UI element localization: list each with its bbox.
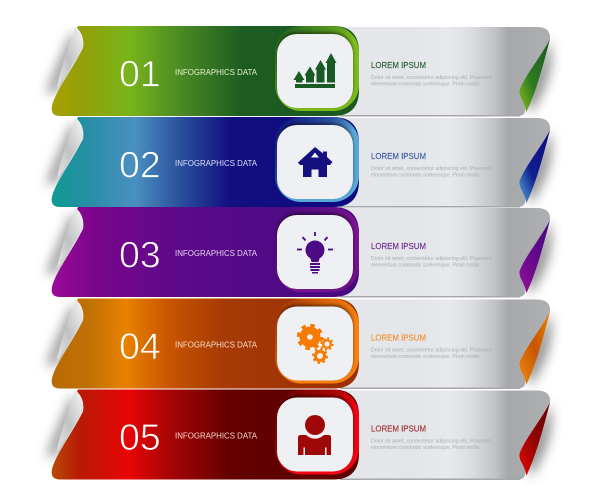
right curl — [519, 130, 550, 203]
right curl shadow — [524, 404, 552, 478]
left curl shadow — [46, 394, 80, 458]
body text — [371, 438, 491, 451]
left silver curl — [57, 300, 83, 360]
right curl — [519, 402, 550, 476]
right white panel — [340, 118, 550, 207]
body text: elementum commodo scelerisque. Proin mollis. — [371, 354, 481, 360]
body text: Dolor sit amet, consectetur adipiscing elit. Praesent — [371, 75, 491, 81]
coloured ribbon — [52, 390, 359, 480]
body text: Dolor sit amet, consectetur adipiscing elit. Praesent — [371, 256, 491, 262]
left curl shadow — [46, 211, 80, 275]
coloured ribbon — [52, 26, 359, 116]
right curl shadow — [524, 40, 552, 114]
icon: rising arrows chart — [294, 53, 336, 88]
right curl shadow — [524, 131, 552, 205]
icon frame ring — [275, 390, 359, 474]
body text: Dolor sit amet, consectetur adipiscing elit. Praesent — [371, 438, 491, 444]
ribbon label: INFOGRAPHICS DATA — [175, 248, 257, 258]
heading: LOREM IPSUM — [371, 332, 426, 342]
body text — [371, 75, 491, 88]
left silver curl — [57, 118, 83, 179]
body text: elementum commodo scelerisque. Proin mollis. — [371, 262, 481, 268]
right white panel — [340, 208, 550, 297]
heading: LOREM IPSUM — [371, 60, 426, 70]
right white panel — [340, 27, 550, 116]
left curl shadow — [46, 302, 80, 366]
body text: Dolor sit amet, consectetur adipiscing elit. Praesent — [371, 348, 491, 354]
ribbon label: INFOGRAPHICS DATA — [175, 340, 257, 350]
icon box shadow — [277, 213, 353, 287]
row 2: home — [46, 117, 552, 208]
body text: elementum commodo scelerisque. Proin mollis. — [371, 172, 481, 178]
heading: LOREM IPSUM — [371, 241, 426, 251]
panel bottom edge — [340, 388, 520, 389]
left silver curl — [57, 27, 83, 88]
icon frame ring — [275, 26, 359, 111]
row 3: idea — [46, 207, 552, 298]
row 4: settings — [46, 298, 552, 389]
number: 04 — [119, 325, 161, 367]
icon box — [277, 215, 353, 289]
icon box shadow — [277, 396, 353, 470]
right curl shadow — [524, 221, 552, 295]
right white panel — [340, 390, 550, 480]
icon: person — [298, 415, 331, 455]
ribbon label: INFOGRAPHICS DATA — [175, 158, 257, 168]
panel bottom edge — [340, 478, 520, 480]
row 1: growth — [46, 26, 552, 116]
icon box shadow — [277, 32, 353, 106]
icon: house — [298, 147, 332, 177]
heading: LOREM IPSUM — [371, 424, 426, 434]
coloured ribbon — [52, 117, 359, 207]
icon frame ring — [275, 298, 359, 384]
icon box — [277, 306, 353, 380]
icon: light bulb — [297, 232, 333, 274]
body text: elementum commodo scelerisque. Proin mollis. — [371, 445, 481, 451]
icon box — [277, 398, 353, 472]
icon box — [277, 125, 353, 199]
right white panel — [340, 300, 550, 388]
body text: Dolor sit amet, consectetur adipiscing elit. Praesent — [371, 166, 491, 172]
panel bottom edge — [340, 296, 520, 298]
left silver curl — [57, 390, 83, 452]
body text — [371, 256, 491, 268]
ribbon label: INFOGRAPHICS DATA — [175, 430, 257, 440]
icon box — [277, 34, 353, 108]
icon: gears — [298, 326, 333, 363]
right curl — [519, 220, 550, 293]
left curl shadow — [46, 30, 80, 94]
heading: LOREM IPSUM — [371, 151, 426, 161]
icon box shadow — [277, 123, 353, 197]
icon frame ring — [275, 207, 359, 292]
body text — [371, 348, 491, 360]
number: 03 — [119, 234, 161, 276]
ribbon label: INFOGRAPHICS DATA — [175, 67, 257, 77]
panel bottom edge — [340, 115, 520, 116]
left curl shadow — [46, 121, 80, 185]
coloured ribbon — [52, 207, 359, 297]
number: 01 — [119, 52, 161, 94]
body text — [371, 166, 491, 178]
right curl shadow — [524, 312, 552, 386]
icon box shadow — [277, 304, 353, 378]
right curl — [519, 312, 550, 384]
right curl — [519, 39, 550, 112]
number: 02 — [119, 144, 161, 186]
icon frame ring — [275, 117, 359, 202]
panel bottom edge — [340, 206, 520, 208]
coloured ribbon — [52, 298, 359, 388]
left silver curl — [57, 208, 83, 269]
row 5: person — [46, 390, 552, 480]
body text: elementum commodo scelerisque. Proin mollis. — [371, 82, 481, 88]
number: 05 — [119, 416, 161, 458]
